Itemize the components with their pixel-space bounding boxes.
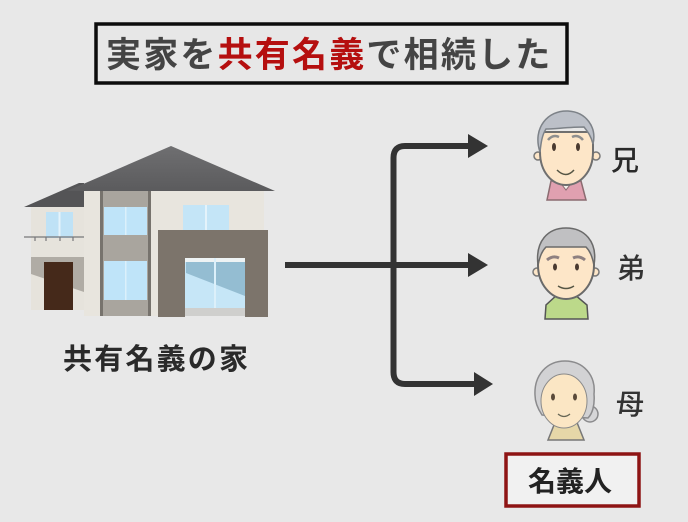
arrows — [285, 134, 493, 396]
arrowhead: elder brother — [468, 134, 488, 158]
label: mother: 母 — [616, 389, 644, 420]
trunk line — [285, 262, 470, 268]
left wing wall — [31, 207, 84, 310]
icon: house — [24, 146, 275, 317]
door — [44, 262, 73, 310]
icon: younger brother — [533, 228, 599, 319]
center column — [100, 191, 151, 316]
title: 実家を共有名義で相続した — [106, 36, 552, 75]
garage frame — [158, 230, 268, 317]
arrowhead: mother — [474, 372, 493, 396]
main roof — [67, 146, 275, 191]
branch up and down — [394, 146, 476, 384]
icon: elder brother — [534, 111, 600, 200]
title — [96, 24, 567, 83]
left roof — [24, 183, 84, 207]
entry alcove — [31, 257, 84, 292]
center lower window — [104, 261, 147, 300]
label: elder brother: 兄 — [611, 145, 639, 176]
main wall — [84, 191, 264, 316]
caption: house: 共有名義の家 — [63, 343, 250, 376]
garage window — [185, 258, 245, 308]
callout: registered holder — [506, 454, 639, 506]
arrowhead: younger brother — [468, 253, 488, 277]
upper right window — [183, 205, 229, 230]
callout: registered holder: 名義人 — [528, 466, 612, 497]
icon: mother — [535, 361, 598, 440]
upper left window — [46, 212, 73, 238]
center upper window — [104, 207, 147, 235]
balcony rail — [24, 237, 84, 241]
label: younger brother: 弟 — [617, 253, 645, 284]
